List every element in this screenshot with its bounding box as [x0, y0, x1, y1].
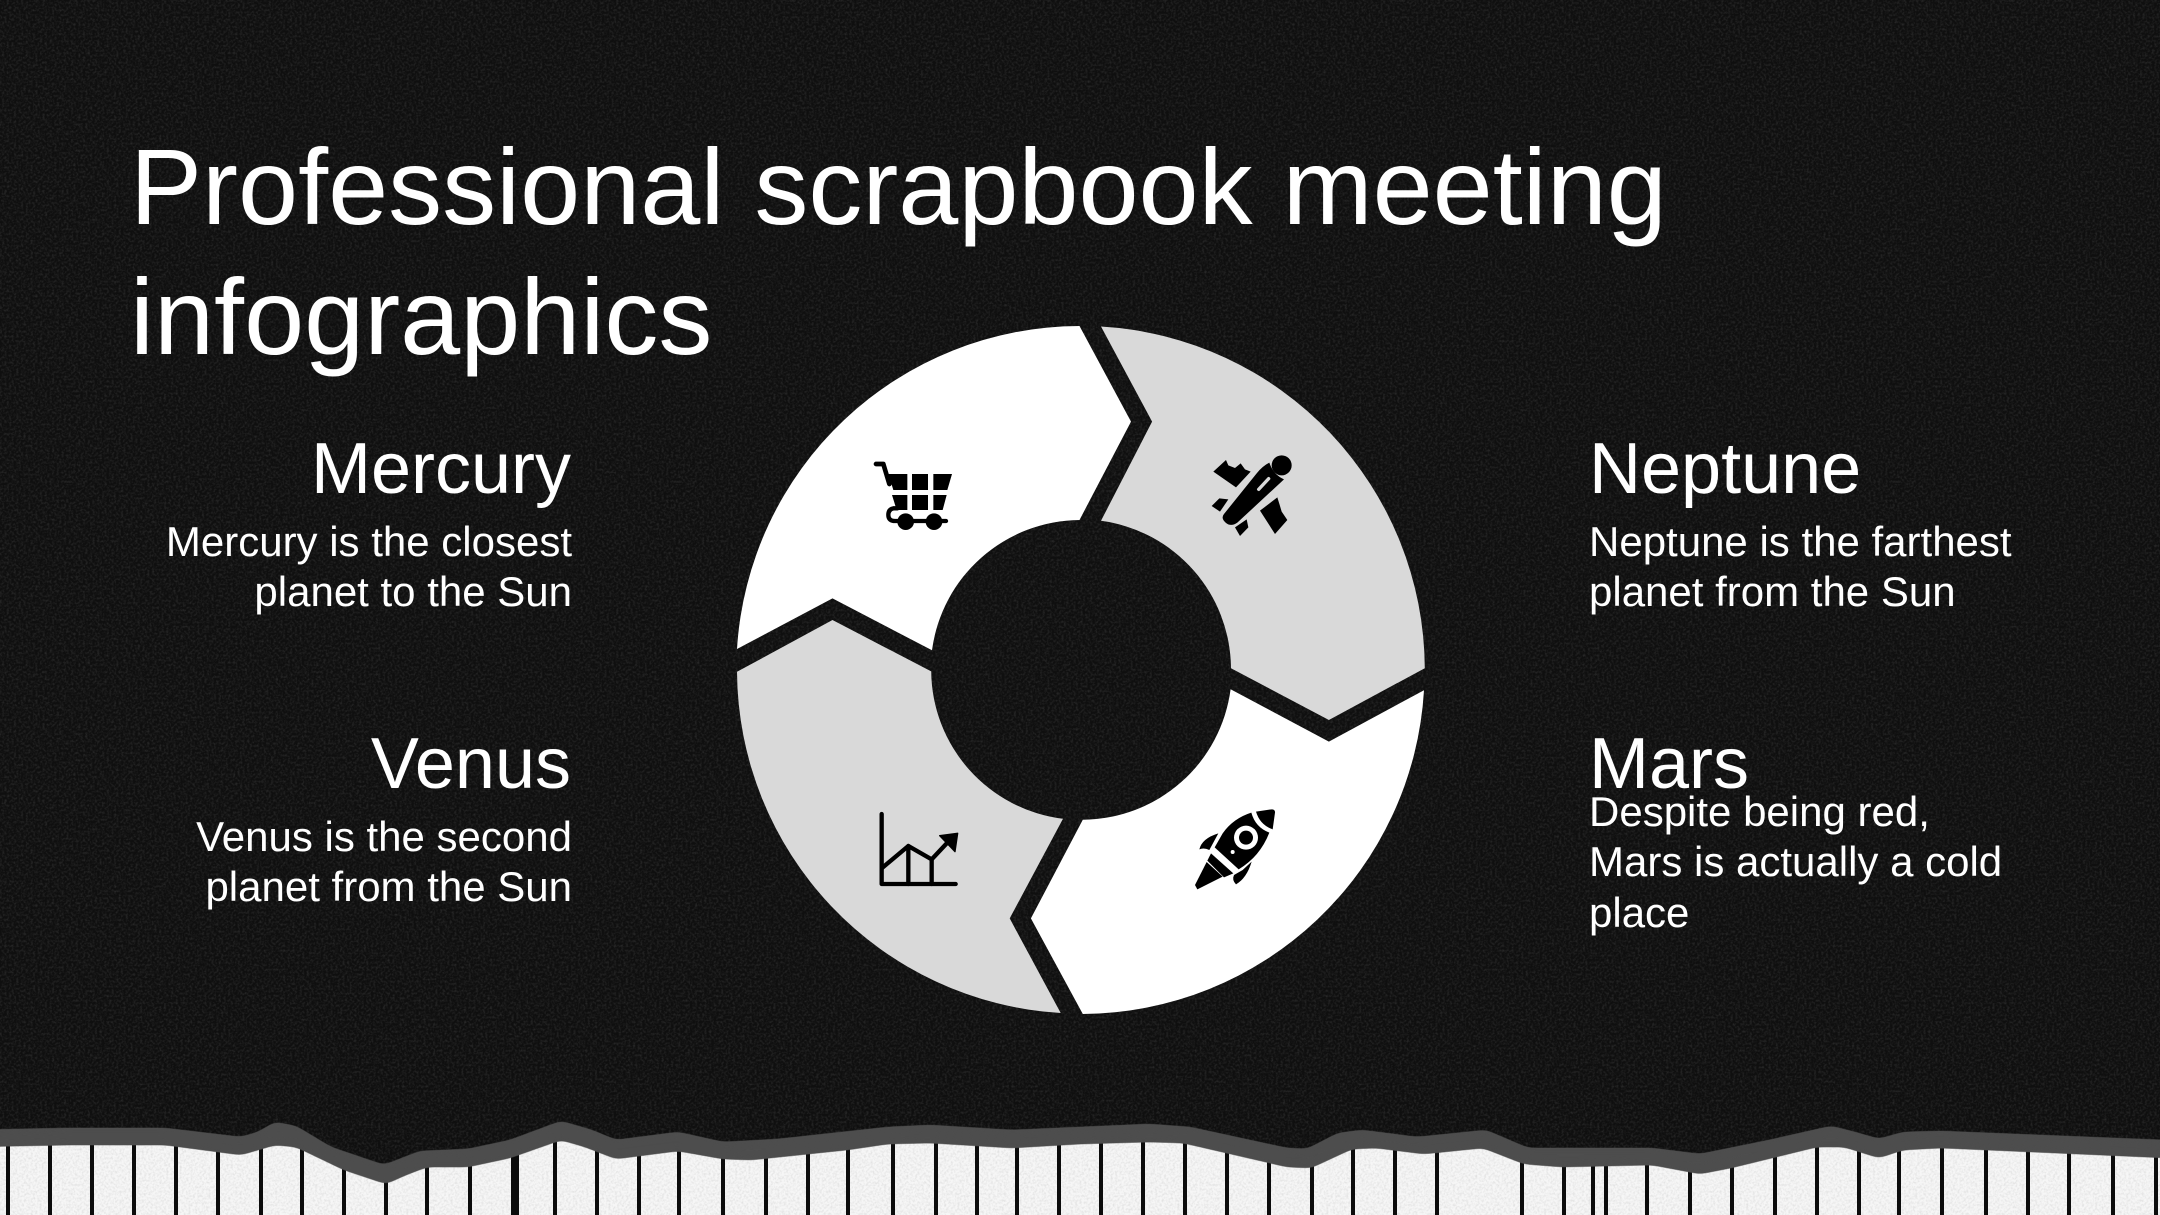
- segment: bottom-left gray: [737, 620, 1063, 1013]
- text: Mars description: Despite being red,: [1589, 788, 1930, 835]
- panel: Mercury: [166, 429, 572, 615]
- heading: Venus: Venus: [371, 724, 571, 804]
- title: Professional scrapbook meeting: [130, 126, 1667, 247]
- text: Mercury description: planet to the Sun: [254, 568, 572, 615]
- segment: top-left white: [737, 326, 1131, 650]
- segment: top-right gray: [1101, 326, 1425, 720]
- text: Neptune description: [1589, 518, 2012, 615]
- text: Mars description: place: [1589, 889, 1689, 936]
- icon: shopping cart: [876, 464, 952, 530]
- heading: Mercury: Mercury: [311, 429, 571, 509]
- text: Mercury description: [166, 518, 572, 615]
- text: Venus description: Venus is the second: [196, 813, 572, 860]
- heading: Neptune: Neptune: [1589, 429, 1861, 509]
- icon: airplane: [1212, 455, 1292, 536]
- panel: Mars: [1589, 724, 2002, 936]
- panel: Neptune: [1589, 429, 2012, 615]
- text: Neptune description: Neptune is the farthest: [1589, 518, 2012, 565]
- title: [130, 126, 1667, 377]
- text: Mars description: [1589, 788, 2002, 936]
- text: Venus description: planet from the Sun: [205, 863, 572, 910]
- text: Mercury description: Mercury is the closest: [166, 518, 572, 565]
- panel: Venus: [196, 724, 572, 910]
- text: Neptune description: planet from the Sun: [1589, 568, 1956, 615]
- segment: bottom-right white: [1031, 689, 1424, 1014]
- icon: rocket: [1195, 809, 1275, 889]
- title: infographics: [130, 256, 712, 377]
- icon: growth chart: [882, 814, 958, 884]
- torn paper strip: [0, 1122, 2160, 1215]
- text: Venus description: [196, 813, 572, 910]
- heading: Mars: Mars: [1589, 724, 1749, 804]
- text: Mars description: Mars is actually a cold: [1589, 838, 2002, 885]
- cycle diagram: [737, 326, 1425, 1014]
